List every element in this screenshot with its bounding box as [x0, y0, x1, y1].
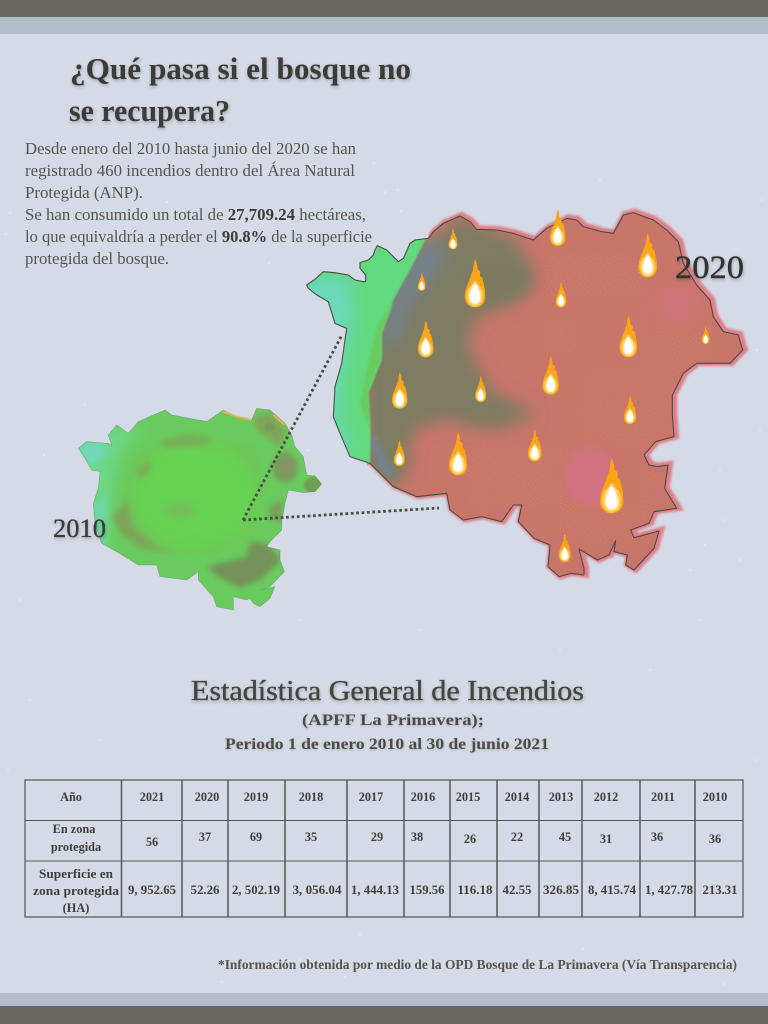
row: Superficie en zona protegida: 2, 502.19 — [232, 883, 280, 897]
row: Superficie en zona protegida: 52.26 — [190, 883, 220, 897]
title: ¿Qué pasa si el bosque no — [70, 51, 411, 86]
statistics table — [25, 780, 743, 917]
row: Superficie en zona protegida: 159.56 — [410, 883, 444, 897]
row: En zona protegida: En zona — [53, 822, 95, 836]
label: 2010: 2010 — [53, 514, 106, 543]
row: Superficie en zona protegida: 1, 444.13 — [351, 883, 399, 897]
intro text: Protegida (ANP). — [25, 183, 143, 202]
row: En zona protegida: 45 — [559, 830, 571, 844]
row: Año: 2013 — [549, 790, 573, 804]
heading subtitle: Periodo 1 de enero 2010 al 30 de junio 2021 — [225, 734, 549, 753]
row: En zona protegida: 36 — [709, 832, 721, 846]
row: Año: 2010 — [703, 790, 727, 804]
row: Superficie en zona protegida: 42.55 — [502, 883, 532, 897]
row: Año: 2018 — [299, 790, 323, 804]
bottom band — [0, 993, 768, 1024]
intro text — [25, 139, 372, 268]
row: En zona protegida: 69 — [250, 830, 262, 844]
row: Año — [60, 790, 727, 804]
row: Superficie en zona protegida — [33, 867, 738, 915]
row: Superficie en zona protegida: 9, 952.65 — [128, 883, 176, 897]
row: Superficie en zona protegida: (HA) — [63, 901, 89, 915]
intro text: registrado 460 incendios dentro del Área Natural — [25, 161, 355, 180]
intro text: Se han consumido un total de 27,709.24 hectáreas, — [25, 205, 366, 224]
row: En zona protegida: protegida — [51, 840, 101, 854]
dotted connector lines — [243, 335, 439, 520]
row: Año: 2017 — [359, 790, 383, 804]
row: Superficie en zona protegida: 3, 056.04 — [292, 883, 342, 897]
heading subtitle — [225, 710, 549, 753]
label: 2020: 2020 — [675, 250, 744, 286]
row: En zona protegida: 37 — [199, 830, 211, 844]
row: Superficie en zona protegida: 326.85 — [543, 883, 579, 897]
row: Año: 2020 — [195, 790, 219, 804]
row: Superficie en zona protegida: zona protegida — [33, 884, 119, 898]
row: Año: 2014 — [505, 790, 529, 804]
title — [69, 51, 411, 128]
row: En zona protegida: 38 — [411, 830, 423, 844]
row: Superficie en zona protegida: 8, 415.74 — [588, 883, 636, 897]
row: En zona protegida: 56 — [146, 835, 158, 849]
row: Año: 2012 — [594, 790, 618, 804]
row: En zona protegida: 31 — [600, 832, 612, 846]
icons: flames — [392, 209, 709, 562]
row: Año: 2021 — [140, 790, 164, 804]
row: En zona protegida: 36 — [651, 830, 663, 844]
row: En zona protegida: 26 — [464, 832, 476, 846]
row: En zona protegida — [51, 822, 721, 854]
top band — [0, 0, 768, 34]
map: 2010 green forest — [73, 408, 323, 610]
heading subtitle: (APFF La Primavera); — [302, 710, 484, 729]
title: se recupera? — [69, 93, 230, 128]
footnote: *Información obtenida por medio de la OPD Bosque de La Primavera (Vía Transparencia) — [218, 957, 737, 972]
heading title: Estadística General de Incendios — [191, 676, 584, 707]
row: Superficie en zona protegida: 1, 427.78 — [645, 883, 693, 897]
row: En zona protegida: 22 — [511, 830, 523, 844]
row: Año: 2016 — [411, 790, 435, 804]
row: Año: Año — [60, 790, 82, 804]
map: 2020 burned forest — [300, 209, 744, 577]
intro text: Desde enero del 2010 hasta junio del 2020 se han — [25, 139, 356, 158]
row: Superficie en zona protegida: 116.18 — [458, 883, 492, 897]
row: En zona protegida: 35 — [305, 830, 317, 844]
intro text: protegida del bosque. — [25, 249, 169, 268]
row: Año: 2015 — [456, 790, 480, 804]
row: Año: 2011 — [651, 790, 675, 804]
statistics heading — [191, 676, 584, 753]
row: En zona protegida: 29 — [371, 830, 383, 844]
intro text: lo que equivaldría a perder el 90.8% de la superficie — [25, 227, 372, 246]
row: Superficie en zona protegida: Superficie en — [39, 867, 113, 881]
row: Superficie en zona protegida: 213.31 — [702, 883, 738, 897]
row: Año: 2019 — [244, 790, 268, 804]
